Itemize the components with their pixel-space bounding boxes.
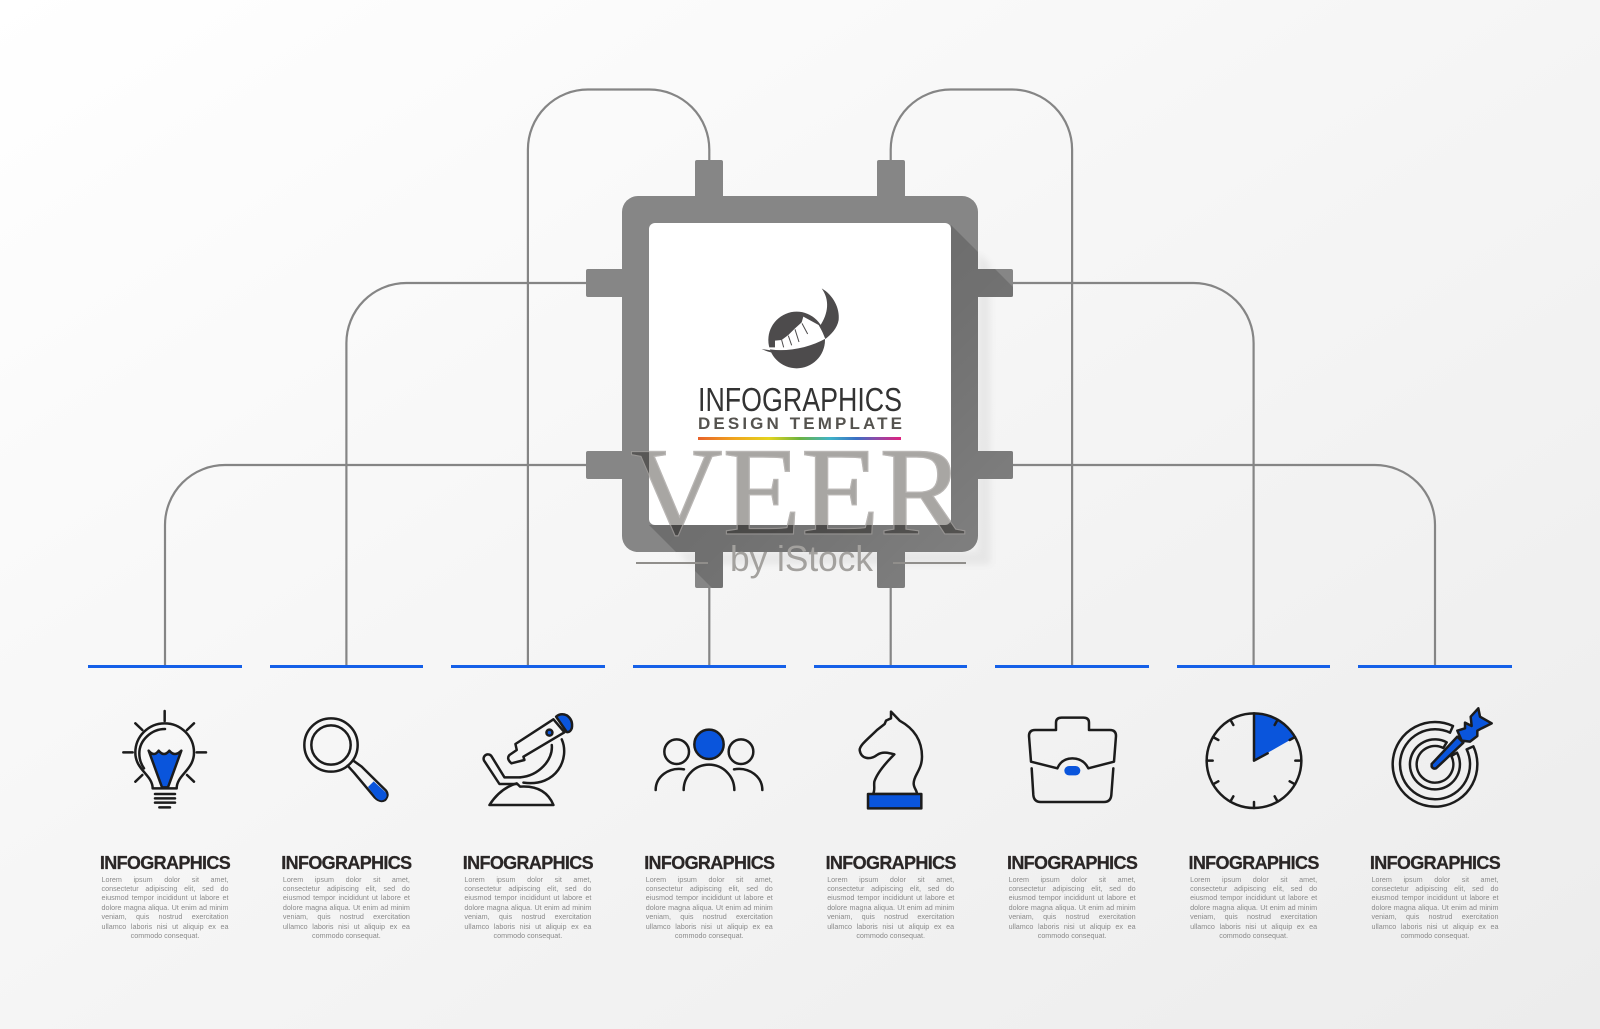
heading: INFOGRAPHICS [826,853,956,873]
icon: clock [1205,712,1303,810]
watermark: VEER [630,423,965,562]
text block: Lorem ipsum dolor sit amet, [1009,874,1136,884]
text block: dolore magna aliqua. Ut enim ad minim [102,903,228,912]
text block: consectetur adipiscing elit, sed do [827,884,954,893]
text block: eiusmod tempor incididunt ut labore et [464,893,591,902]
text block: Lorem ipsum dolor sit amet, [102,874,228,884]
logo title: INFOGRAPHICS [698,381,902,418]
text block: commodo consequat. [1038,931,1106,940]
text block: eiusmod tempor incididunt ut labore et [1372,893,1498,902]
column 7: time [1177,665,1330,940]
text block: eiusmod tempor incididunt ut labore et [102,893,228,902]
text block: ullamco laboris nisi ut aliquip ex ea [827,922,954,931]
connector lines [165,90,1435,666]
text block: veniam, quis nostrud exercitation [827,912,954,921]
text block: ullamco laboris nisi ut aliquip ex ea [1372,922,1498,931]
text block: dolore magna aliqua. Ut enim ad minim [283,903,410,912]
text block [827,874,954,940]
icon: target with arrow [1391,707,1493,808]
icon: briefcase [1028,716,1118,804]
text block: eiusmod tempor incididunt ut labore et [827,893,954,902]
icon: chess knight [858,710,924,810]
text block: Lorem ipsum dolor sit amet, [827,874,954,884]
text block: eiusmod tempor incididunt ut labore et [283,893,410,902]
text block: commodo consequat. [131,931,199,940]
text block: commodo consequat. [675,931,744,940]
icon: magnifier [303,717,389,802]
watermark: by iStock [730,538,874,579]
heading: INFOGRAPHICS [1370,853,1500,873]
text block [102,874,228,940]
text block: consectetur adipiscing elit, sed do [1190,884,1317,893]
text block: eiusmod tempor incididunt ut labore et [646,893,773,902]
text block: dolore magna aliqua. Ut enim ad minim [1009,903,1136,912]
text block: consectetur adipiscing elit, sed do [102,884,228,893]
column 6: business [995,665,1149,940]
text block: dolore magna aliqua. Ut enim ad minim [646,903,773,912]
text block: veniam, quis nostrud exercitation [464,912,591,921]
text block: Lorem ipsum dolor sit amet, [1190,874,1317,884]
text block: Lorem ipsum dolor sit amet, [283,874,410,884]
text block: veniam, quis nostrud exercitation [283,912,410,921]
logo subtitle: DESIGN TEMPLATE [698,414,902,433]
text block [464,874,592,940]
text block: ullamco laboris nisi ut aliquip ex ea [1190,922,1317,931]
soft outer shadow [678,252,990,564]
text block: ullamco laboris nisi ut aliquip ex ea [464,922,591,931]
text block: consectetur adipiscing elit, sed do [1372,884,1498,893]
text block: Lorem ipsum dolor sit amet, [1372,874,1498,884]
heading: INFOGRAPHICS [644,853,774,873]
column 3: research [451,665,605,940]
heading: INFOGRAPHICS [463,853,593,873]
heading: INFOGRAPHICS [281,853,412,873]
text block: consectetur adipiscing elit, sed do [646,884,773,893]
text block [646,874,773,940]
text block: Lorem ipsum dolor sit amet, [464,874,591,884]
text block: commodo consequat. [312,931,381,940]
text block [1008,874,1136,940]
text block: dolore magna aliqua. Ut enim ad minim [1372,903,1498,912]
text block: ullamco laboris nisi ut aliquip ex ea [646,922,773,931]
icon: microscope [482,713,574,806]
column 1: idea [88,665,242,940]
text block: dolore magna aliqua. Ut enim ad minim [464,903,591,912]
text block: Lorem ipsum dolor sit amet, [646,874,773,884]
heading: INFOGRAPHICS [1007,853,1137,873]
column 8: goal [1358,665,1512,940]
text block: ullamco laboris nisi ut aliquip ex ea [283,922,410,931]
text block: ullamco laboris nisi ut aliquip ex ea [1009,922,1136,931]
text block: consectetur adipiscing elit, sed do [464,884,591,893]
rainbow bar [698,437,901,440]
text block: commodo consequat. [1219,931,1288,940]
white card [649,223,951,525]
text block: commodo consequat. [856,931,925,940]
text block: veniam, quis nostrud exercitation [1009,912,1136,921]
icon: people [654,728,764,792]
text block: ullamco laboris nisi ut aliquip ex ea [102,922,228,931]
text block: dolore magna aliqua. Ut enim ad minim [1190,903,1317,912]
text block: veniam, quis nostrud exercitation [1190,912,1317,921]
column 5: strategy [814,665,967,940]
heading: INFOGRAPHICS [100,853,230,873]
text block [1372,874,1498,940]
text block: eiusmod tempor incididunt ut labore et [1009,893,1136,902]
text block: commodo consequat. [1401,931,1469,940]
column 4: team [633,665,786,940]
heading: INFOGRAPHICS [1188,853,1319,873]
text block: eiusmod tempor incididunt ut labore et [1190,893,1317,902]
watermark: VEER [630,423,965,562]
icon: logo mark [760,288,839,368]
column 2: search [270,665,423,940]
chip frame with tabs [586,160,1013,588]
long shadow on frame [649,225,1015,589]
icon: light bulb [122,710,208,809]
text block: veniam, quis nostrud exercitation [1372,912,1498,921]
text block: consectetur adipiscing elit, sed do [283,884,410,893]
text block: veniam, quis nostrud exercitation [102,912,228,921]
text block: consectetur adipiscing elit, sed do [1009,884,1136,893]
text block: veniam, quis nostrud exercitation [646,912,773,921]
text block: commodo consequat. [494,931,562,940]
text block [283,874,410,940]
text block: dolore magna aliqua. Ut enim ad minim [827,903,954,912]
text block [1190,874,1318,940]
connectors and central chip [164,88,1436,665]
